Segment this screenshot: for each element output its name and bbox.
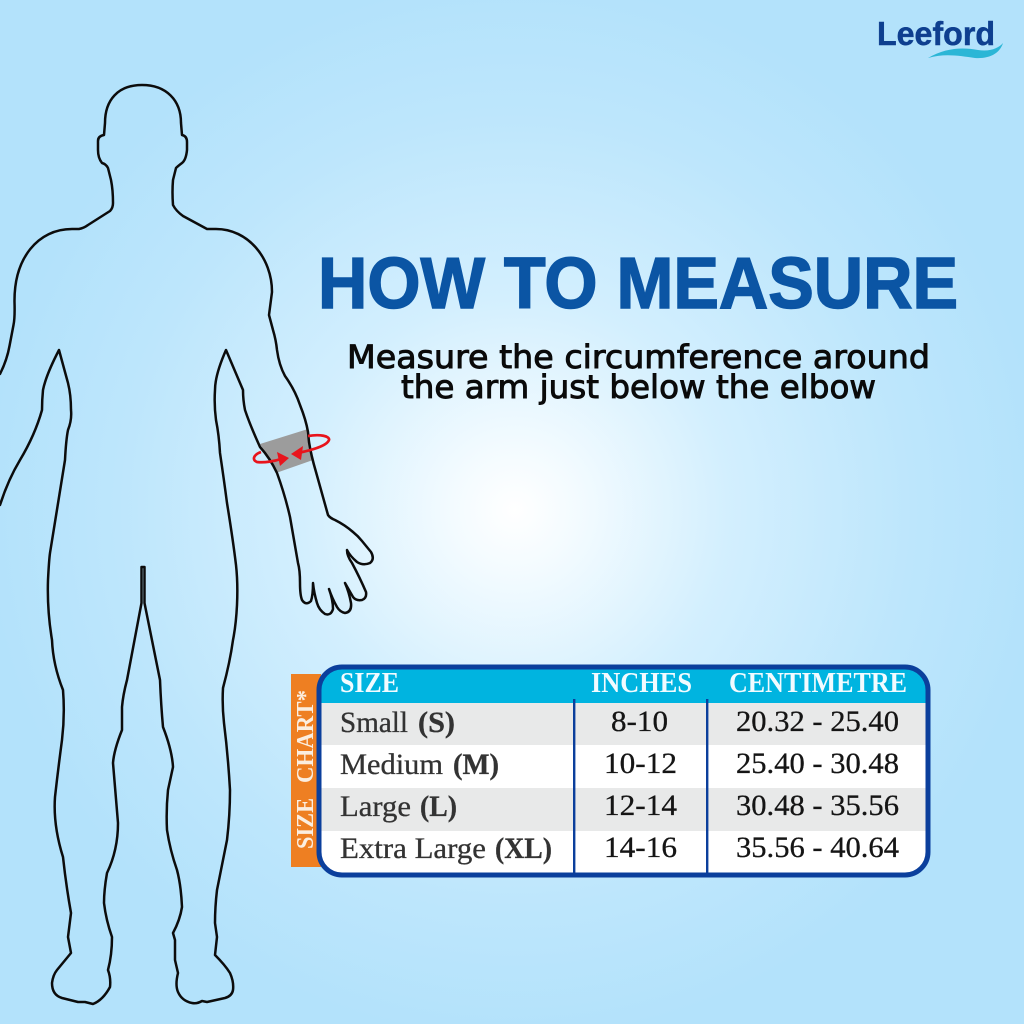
logo: Leeford: Leeford [877,15,995,52]
size names: (S) [418,706,455,739]
column dividers [573,699,575,874]
inches values: 8-10 [611,705,668,738]
instruction text [347,338,930,406]
size chart tag: SIZE [293,798,319,849]
size chart tag [291,674,321,867]
centimetre values [736,705,899,864]
size names: Medium [340,748,443,781]
header labels [340,667,907,699]
instruction text: the arm just below the elbow [401,368,876,406]
header labels: CENTIMETRE [729,667,907,699]
red measuring arrows [254,435,329,466]
size names: (M) [453,748,499,781]
centimetre values: 20.32 - 25.40 [736,705,899,738]
centimetre values: 35.56 - 40.64 [736,831,899,864]
size chart table [319,667,928,875]
inches values: 10-12 [604,747,677,780]
instruction text: Measure the circumference around [347,338,930,376]
table border [319,667,928,875]
body outline [0,85,373,1004]
size names: (L) [420,790,457,823]
size names [340,706,552,865]
centimetre values: 30.48 - 35.56 [736,789,899,822]
size names: (XL) [495,832,552,865]
measuring band on forearm [260,429,313,473]
body silhouette with measuring band [0,85,373,1004]
size chart tag: CHART* [293,690,319,783]
size names: Large [340,790,411,823]
centimetre values: 25.40 - 30.48 [736,747,899,780]
inches values: 14-16 [604,831,677,864]
size names: Extra Large [340,832,486,865]
header labels: SIZE [340,667,399,699]
row stripes [319,703,928,745]
size names: Small [340,706,408,739]
inches values: 12-14 [604,789,677,822]
title: HOW TO MEASURE [318,244,958,324]
inches values [604,705,677,864]
table header band [319,667,928,703]
header labels: INCHES [591,667,692,699]
